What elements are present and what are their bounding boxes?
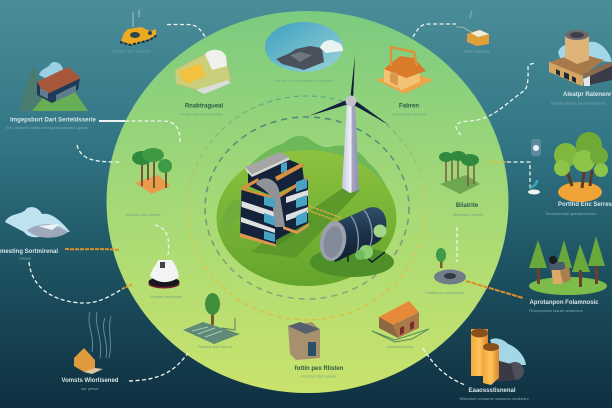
caption: small generator: Miser bacccks <box>464 48 490 54</box>
caption: brick cabin: smatserpcnicw <box>387 344 413 349</box>
caption: smoke cabin: sar petser <box>81 386 100 391</box>
icon: lake plant <box>265 22 343 72</box>
icon: trees on sand island <box>554 132 608 202</box>
heading: factory: Aleatpr Ratenenr <box>563 92 612 98</box>
caption: sand island: Tseasaletsiatl gaeiatmeteoks <box>545 211 596 216</box>
heading: grove: Bilatrite <box>456 203 479 209</box>
caption: cloud: Stiouly <box>19 256 31 260</box>
caption: factory: Weiubertsutde sieal tbespelore <box>551 100 607 106</box>
caption: white vessel: Pooass besbeads <box>150 294 182 299</box>
icon: smoke cabin <box>74 312 111 374</box>
heading: capsule: Rnabtragueal <box>185 104 224 110</box>
heading: orange house: Fabren <box>399 104 419 110</box>
icon: tree and solar plot <box>183 293 240 344</box>
caption: forest: Rosrpuanine lasrarl ansanoes <box>529 308 583 313</box>
icon: forest and person <box>529 236 607 295</box>
caption: tree plot: Rosslar sdd mon a <box>198 344 232 349</box>
icon: barn on hill <box>19 62 88 111</box>
caption: capsule: Remar last selek ponies <box>180 112 222 116</box>
heading: pipes: Eaaossstisnenal <box>468 388 516 394</box>
dashed orbit rings <box>188 96 426 320</box>
heading: shop: fottin pex Rlisten <box>295 366 344 372</box>
heading: cloud: mesting Sortmirenal <box>0 249 58 255</box>
caption: lake plant: Hamas of Inces tobene to pusiper <box>274 78 335 83</box>
icon: factory with chimney <box>549 30 612 86</box>
icon: orange pipes and cloud <box>471 328 526 385</box>
caption: grove: dirpraswe sineaio <box>452 212 484 217</box>
heading: smoke cabin: Vomsts Wlorlisened <box>62 378 119 384</box>
caption: shop: Rozcsar ssd wanlse <box>301 374 338 378</box>
icon: palm grove <box>132 148 172 194</box>
icon: excavator <box>120 10 157 45</box>
caption: pipes: Wiknafurt senasrne salaaons sedbeanl <box>460 396 529 401</box>
heading: forest: Aprotanpon Folamnosic <box>530 300 599 306</box>
core island <box>216 136 396 286</box>
office building <box>240 152 342 247</box>
icon: tree and manhole <box>434 248 466 284</box>
icon: grove on disc <box>439 151 480 194</box>
icon: capsule machine <box>175 50 231 94</box>
wind turbine <box>309 55 389 193</box>
heading: left barn: Imgepsbort Dart Serteldsserie <box>10 118 97 124</box>
icon: small generator <box>456 11 489 46</box>
icon: shop building <box>288 322 320 360</box>
icon: sensor badge <box>528 139 541 194</box>
caption: manhole: Chaitaons scmeeoces <box>425 290 464 295</box>
label: excavator: Dozaber dett Searcd3 <box>112 48 151 54</box>
heading: sand island: Portlhd Enc Serres <box>558 202 612 208</box>
caption: left barn: liver priocess baida bieaagerpnabnaiolo-golde <box>6 125 89 130</box>
icon: brick cabin <box>372 301 429 342</box>
caption: palm grove: Ansdon pas panges <box>125 212 161 217</box>
caption: orange house: Stuidiatone beaects <box>391 112 427 116</box>
icon: small cloud and plane <box>5 207 70 238</box>
storage tank <box>310 207 394 277</box>
icon: white vessel <box>148 260 180 288</box>
connector lines <box>29 24 536 385</box>
central green disc <box>106 11 508 393</box>
icon: orange house <box>376 47 433 94</box>
